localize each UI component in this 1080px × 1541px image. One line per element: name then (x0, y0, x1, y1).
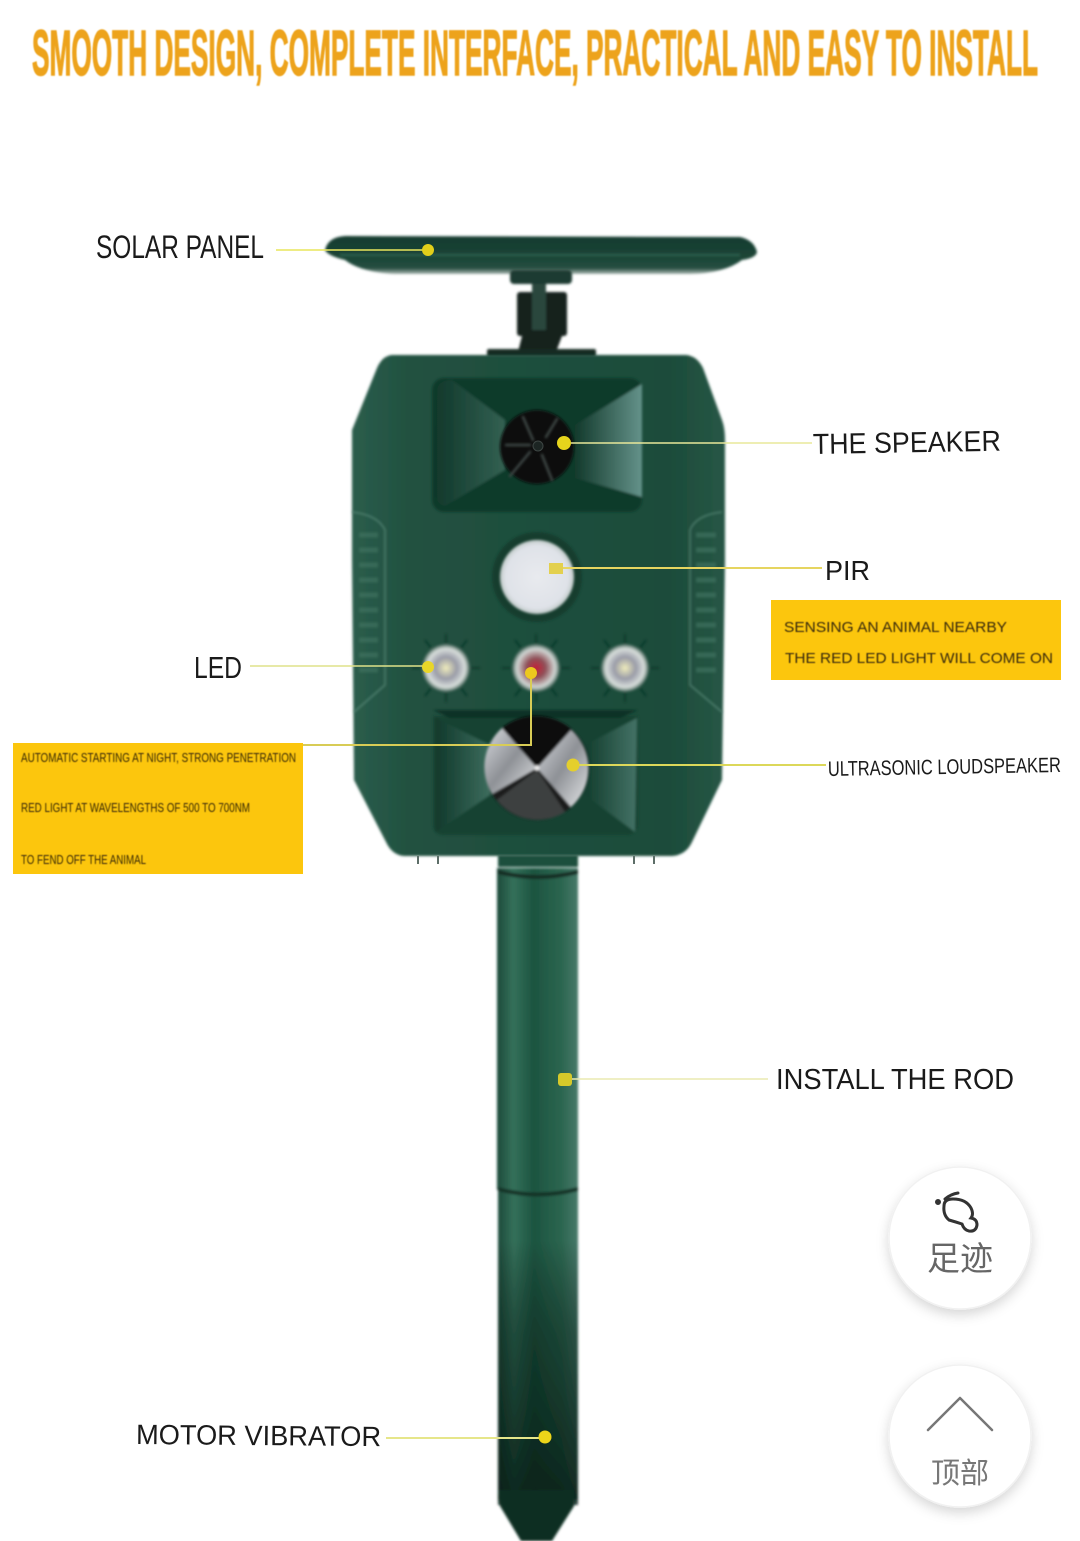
label: solar panel (96, 229, 434, 265)
callout: PIR sensing (771, 600, 1061, 680)
side grips (352, 512, 722, 712)
icon: footprint (936, 1193, 977, 1231)
label: solar panel: SOLAR PANEL (96, 229, 264, 265)
label: LED: LED (194, 650, 242, 685)
callout: PIR sensing: SENSING AN ANIMAL NEARBY (784, 619, 1007, 636)
label: PIR (549, 555, 870, 586)
body housing (352, 355, 725, 856)
label: ultrasonic loudspeaker (566, 754, 1061, 781)
button: back to top: 顶部 (931, 1457, 989, 1490)
label: the speaker: THE SPEAKER (813, 426, 1001, 461)
callout: automatic night light (13, 667, 537, 874)
upper horn (432, 378, 642, 512)
label: motor vibrator (136, 1419, 552, 1452)
button: back to top (889, 1365, 1031, 1507)
mounting pegs (418, 856, 654, 864)
label: PIR: PIR (825, 555, 870, 586)
solar panel (325, 236, 757, 274)
PIR sensor (492, 532, 582, 622)
button: footprint (889, 1167, 1031, 1309)
callout: PIR sensing: THE RED LED LIGHT WILL COME ON (785, 650, 1053, 667)
label: the speaker (557, 426, 1001, 461)
button: footprint: 足迹 (927, 1240, 993, 1277)
speaker grille (500, 410, 574, 484)
LED lights (412, 634, 659, 702)
label: install the rod: INSTALL THE ROD (776, 1064, 1014, 1096)
label: install the rod (558, 1064, 1014, 1096)
product: solar pest repeller (325, 236, 757, 1541)
label: motor vibrator: MOTOR VIBRATOR (136, 1419, 381, 1452)
label: LED (194, 650, 434, 685)
lower horn (433, 710, 638, 835)
callout: automatic night light: TO FEND OFF THE ANIMAL (21, 852, 146, 867)
mounting rod (497, 855, 578, 1541)
panel bracket (487, 270, 596, 357)
ultrasonic disc (484, 716, 589, 820)
callout: automatic night light: RED LIGHT AT WAVELENGTHS OF 500 TO 700NM (21, 800, 250, 815)
callout: automatic night light: AUTOMATIC STARTING AT NIGHT, STRONG PENETRATION (21, 750, 296, 765)
icon: up chevron (928, 1398, 992, 1430)
